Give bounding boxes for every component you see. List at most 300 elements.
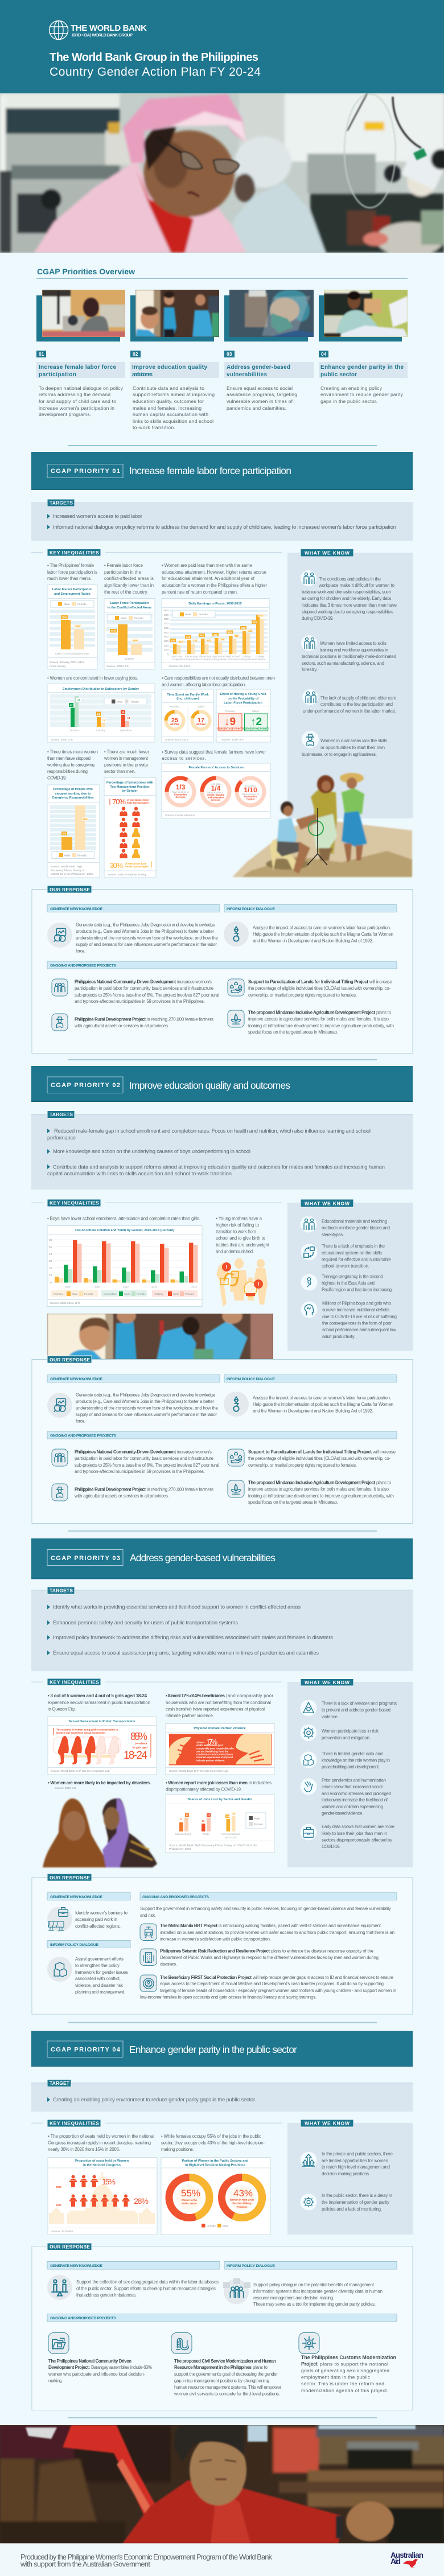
text: dialogue: resource management and decision-making. (253, 2295, 334, 2301)
chart: people who stopped working due to caregiving: Percentage of People who (53, 788, 93, 791)
header banner (0, 0, 444, 93)
chart: labor market participation: and Employment Ratios (54, 592, 91, 596)
chart: effect of having a young child (216, 689, 270, 742)
chart: conflict-affected areas: 77% (111, 629, 116, 632)
chart: sexual harassment: Quezon City experience sexual harassment (56, 1731, 106, 1734)
chart: seats held by women: 28% (134, 2196, 149, 2205)
text: young mothers: babies that are underweight (216, 1242, 270, 1248)
chart: enterprises with top management position: of enterprises have (125, 862, 147, 865)
text: seats in congress (48, 2134, 154, 2152)
know item 1: Educational materials and teaching (322, 1219, 387, 1224)
project: parcelization: will increase (372, 1449, 396, 1455)
text: disasters (48, 1780, 151, 1790)
tag: targets (47, 1111, 75, 1118)
chart: enterprises with top management position: male top managers (127, 801, 149, 804)
know item 1 (301, 1216, 390, 1237)
chart: out-of-school children: 60 (49, 1238, 52, 1242)
icon: dialogue (223, 2278, 250, 2304)
project: community-driven development: increases women's (177, 979, 212, 985)
project: customs modernization: employment data in the public (301, 2375, 371, 2380)
project: mindanao agriculture (228, 1010, 394, 1035)
project: mindanao agriculture: plans to (376, 1480, 392, 1485)
chart: daily earnings: 341 (235, 635, 239, 637)
know item 1: There is a lack of services and programs (322, 1701, 397, 1706)
priority 04 banner (31, 2031, 413, 2067)
chart: effect of having a young child: Females (225, 710, 235, 713)
card 01 number: 01 (39, 351, 44, 357)
chart: shares of jobs lost: Male (254, 1817, 260, 1820)
text: barriers (75, 1910, 128, 1929)
tag: target (47, 2080, 71, 2087)
chart: shares of jobs lost: Manufacturing (175, 1833, 191, 1836)
chart: female farmers' access to services (162, 763, 270, 818)
know item 5: COVID-19. (322, 1844, 340, 1849)
project: customs modernization: modernization agenda of this project. (301, 2388, 388, 2393)
chart: labor market participation: Labor Market Participation (52, 588, 93, 591)
card 03 title: Address gender-based (227, 364, 290, 371)
chart: shares of jobs lost: 21 (180, 1818, 183, 1821)
text: intimate partner violence: cash transfer) have reported experiences of physical (166, 1706, 265, 1712)
chart: out-of-school children: 2009 (94, 1285, 100, 1289)
icon: knowledge (47, 923, 72, 948)
know item 2: sectors, such as manufacturing, science, and (302, 661, 384, 666)
know item 4: adult productivity. (322, 1334, 355, 1339)
project: national community driven: The Philippines National Community Driven (48, 2359, 131, 2364)
know item 1: during COVID-19. (302, 616, 334, 621)
chart: labor market participation: Labor Force Participation Rate (55, 652, 89, 655)
subheading: ongoing and proposed projects (47, 2314, 397, 2322)
text: young mothers: higher risk of failing to (216, 1223, 260, 1228)
chart: daily earnings: 0 (167, 653, 168, 656)
card 04 text (320, 385, 404, 404)
panel: key inequalities 03 (31, 1678, 282, 1867)
card 01 photo (36, 290, 125, 341)
text: young mothers: • Young mothers have a (216, 1216, 262, 1221)
text: seats in congress: nearly 30% in 2020 from 15% in 2006. (48, 2147, 120, 2152)
chart: physical intimate partner violence: Source: World Bank EAP Gender Innovation Lab (169, 1770, 228, 1773)
chart: physical intimate partner violence: are not benefitting from the (196, 1750, 229, 1753)
chart: out-of-school children: 2015 (151, 1285, 157, 1289)
chart: daily earnings: Daily Earnings in Pesos, 2006-2015 (188, 602, 242, 606)
project: rural development: Philippine Rural Development Project (75, 1017, 146, 1022)
text: public sector jobs: sector, they occupy only 43% of the high-level decision- (161, 2140, 265, 2146)
chart: physical intimate partner violence: Almost (196, 1741, 205, 1744)
know item 1: violence. (322, 1714, 339, 1719)
text: policy framework: framework for gender issues (75, 1970, 128, 1975)
tag: targets (47, 499, 75, 507)
panel: key inequalities 01 (31, 549, 282, 781)
project: parcelization: will increase (369, 979, 393, 985)
project: rural development: Philippine Rural Development Project (75, 1487, 146, 1492)
priority 04 banner: Enhance gender parity in the public sector (129, 2044, 297, 2055)
card 02 text: Contribute data and analysis to (133, 385, 204, 391)
text: dialogue: information systems that incorporate gender diversity data in human (253, 2289, 383, 2294)
panel: targets 03: Identify what works in providing essential services and livelihood support to women in conflict-affected areas (53, 1604, 301, 1610)
overview card 02 (130, 290, 219, 430)
text: pay gap: education for a woman in the Philippines offers a higher (162, 583, 267, 588)
chart: female farmers' access to services: have access to (172, 791, 189, 793)
chart: conflict-affected areas: BARMM (125, 657, 134, 660)
chart: out-of-school children: 2006 (65, 1285, 71, 1289)
project: beneficiary first: will help reduce gender gaps in access to ID and financial services to ensure (252, 1975, 394, 1980)
chart: daily earnings: High School (226, 655, 240, 658)
subheading: inform policy dialogue: INFORM POLICY DIALOGUE (227, 2264, 275, 2268)
chart: time spent on family work: Source: ISSP 2012 (165, 738, 188, 742)
know item 4: and economic stresses and prolonged (322, 1791, 391, 1796)
chart: women in public sector and decision-making: Male (223, 2224, 229, 2228)
text: data: that address gender imbalances. (76, 2293, 137, 2298)
photo: woman weaving (0, 2425, 444, 2544)
logo: The World Bank: IBRD • IDA | WORLD BANK GROUP (72, 32, 133, 38)
chart: sexual harassment: 18-24 (124, 1750, 147, 1762)
know item 1: indicates that 3 times more women than men have (302, 603, 397, 608)
text: ongoing intro: Support the government in enhancing safety and security in public services, focusing on gender-based violence and female vulnerability (140, 1906, 391, 1911)
chart: female farmers' access to services: services (211, 799, 221, 801)
subheading: generate new knowledge: GENERATE NEW KNOWLEDGE (50, 2264, 102, 2268)
text: knowledge: Generate data (e.g., the Philippines Jobs Diagnostic) and develop knowledge (76, 1392, 216, 1398)
text: conflict areas (104, 563, 154, 595)
project: national community driven: women who participate and influence local decision- (48, 2372, 145, 2377)
project: metro manila BRT: installed on buses and at stations, to provide women with safer access to and from public transport, ensuring that there is an (160, 1930, 394, 1935)
chart: daily earnings: College (242, 655, 251, 658)
text: disasters: Source: 2019 ILO (55, 1787, 76, 1790)
card 01 text (39, 385, 124, 417)
card 03 text: assistance programs, targeting (227, 392, 297, 397)
card 01 title: Increase female labor force (39, 364, 116, 371)
chart: effect of having a young child: PERCENTAGE POINTS (243, 727, 269, 730)
chart: out-of-school children: 50 (49, 1245, 52, 1249)
chart: physical intimate partner violence: comparably poor households who (196, 1747, 234, 1750)
know item 5: sectors disproportionately affected by (322, 1837, 392, 1843)
card 01 text: for and supply of child care and to (39, 398, 116, 404)
chart: sexual harassment (48, 1717, 157, 1775)
chart: women in public sector and decision-making: 55% (181, 2188, 200, 2199)
text: policy framework: planning and management. (75, 1990, 125, 1994)
panel: targets 03: Ensure equal access to social assistance programs, targeting vulnerable women in times of pandemics and calamities (53, 1649, 319, 1656)
text: seats in congress: Congress increased rapidly in recent decades, reaching (48, 2140, 151, 2146)
know item 5 (301, 1824, 395, 1849)
priority 03 banner (31, 1538, 413, 1579)
project: beneficiary first: equal access to the Department of Social Welfare and Development's cash transfer programs. It will do so by supporting (160, 1981, 384, 1986)
card 03 number: 03 (227, 351, 232, 357)
know item 2: policies and a lack of monitoring. (322, 2207, 382, 2212)
chart: labor market participation: 75% (62, 616, 67, 619)
text: sexual harassment: experience sexual harassment in public transportation (48, 1700, 150, 1705)
project: parcelization: the percentage of eligible individual titles (CLOAs) issued with ownership, co- (248, 1456, 390, 1461)
chart: daily earnings: High School (212, 655, 225, 658)
chart: out-of-school children: 40 (49, 1253, 52, 1256)
chart: seats held by women: 2006 (56, 2186, 61, 2188)
chart: shares of jobs lost: Shares of Jobs Lost by Sector and Gender (187, 1798, 252, 1801)
text: caregiving: COVID-19. (47, 775, 67, 781)
chart: daily earnings (162, 599, 269, 669)
text: job losses: in industries (249, 1780, 272, 1785)
project: civil service modernization: Resource Management in the Philippines (174, 2365, 252, 2370)
chart: daily earnings: 519 (241, 627, 246, 629)
chart: enterprises with top management position: female top managers (125, 865, 149, 868)
project: rural development: is reaching 270,000 female farmers (147, 1487, 213, 1492)
graphic: young mothers: ! (225, 1265, 228, 1271)
know item 4: school performance and subsequent low (322, 1327, 396, 1332)
chart: people who stopped working due to caregiving: 3% (63, 832, 66, 835)
tag: target: TARGET (50, 2080, 70, 2086)
project: civil service modernization: support the government's goal of decreasing the gender (174, 2372, 278, 2377)
text: management (104, 749, 149, 774)
text: pay gap: percent rate of return compared to men. (162, 590, 238, 595)
text: data: of the public sector. Support efforts to develop human resources strategies (76, 2286, 216, 2291)
know item 2: In the public sector, there is a delay in (322, 2193, 392, 2198)
panel: what we know 03 (287, 1679, 413, 1867)
tag: what we know: WHAT WE KNOW (305, 2121, 350, 2126)
priority 01 banner: CGAP PRIORITY 01 (51, 468, 120, 475)
know item 3: peacebuilding and development. (322, 1764, 380, 1770)
know item 2 (301, 2193, 392, 2212)
know item 2: Women participate less in risk (322, 1729, 379, 1734)
project: mindanao agriculture: special focus on the targeted areas in Mindanao. (248, 1030, 338, 1035)
chart: daily earnings: Source: 2019 ILO (169, 665, 191, 668)
project: seismic risk: Department of Public Works and Highways to respond to the different vulnerabilities faced by men and women during (160, 1955, 379, 1960)
know item 1: stopped working due to caregiving responsibilities (302, 609, 393, 615)
chart: employment distribution: Male (117, 700, 123, 703)
chart: daily earnings: 700 (164, 622, 168, 626)
chart: labor market participation: Female (77, 603, 87, 606)
text: lower paying jobs: • Women are concentrated in lower paying jobs. (47, 676, 138, 681)
tag: targets: TARGETS (50, 1588, 73, 1594)
text: public sector jobs: • While females occupy 55% of the jobs in the public (161, 2134, 261, 2139)
text: policy: Analyze the impact of access to care on women's labor force participation. (253, 925, 391, 930)
text: caregiving: • Three times more women (47, 749, 98, 755)
chart: out-of-school children: 30 (49, 1260, 52, 1263)
project: community-driven development (52, 979, 219, 1004)
chart: conflict-affected areas: Female (134, 617, 143, 620)
chart: seats held by women (48, 2157, 157, 2235)
text: management: sector than men. (104, 769, 135, 774)
subheading: inform policy dialogue (224, 1375, 397, 1382)
text: knowledge (76, 922, 219, 954)
tag: what we know: WHAT WE KNOW (305, 1680, 350, 1685)
chart: out-of-school children: Out-of-school Children and Youth by Gender, 2006-2018 (Percent) (75, 1229, 174, 1232)
subheading: ongoing and proposed projects (140, 1893, 397, 1900)
know item 2 (301, 635, 396, 672)
tag: what we know: WHAT WE KNOW (305, 1201, 350, 1207)
chart: time spent on family work: HRS/WK (196, 723, 205, 726)
text: job losses: disproportionately affected by COVID-19. (166, 1787, 242, 1792)
footer (0, 2543, 444, 2576)
project: community-driven development: participation in paid labor for community basic services and infrastructure (75, 986, 214, 991)
card 04 title: public sector (320, 372, 357, 378)
project: parcelization (228, 979, 393, 998)
section heading: CGAP Priorities Overview: CGAP Priorities Overview (37, 267, 135, 276)
text: policy: Analyze the impact of access to care on women's labor force participation. (253, 1396, 391, 1400)
tag: what we know (301, 1679, 353, 1686)
chart: time spent on family work: Females (170, 705, 180, 708)
project: civil service modernization: The proposed Civil Service Modernization and Human (174, 2359, 276, 2364)
overview card 04 (319, 290, 408, 404)
project: mindanao agriculture: improve access to agriculture services for both males and females. It is also (248, 1487, 389, 1492)
text: policy framework: violence, and disaster risk (75, 1983, 123, 1988)
project: seismic risk: plans to enhance the disaster response capacity of the (271, 1949, 374, 1953)
chart: sexual harassment: Source: World Bank EAP Gender Innovation Lab (51, 1770, 110, 1773)
card 03 photo (224, 290, 314, 341)
project: customs modernization (299, 2332, 396, 2393)
text: policy: and the Women in Development and Nation Building Act of 1992. (253, 1408, 373, 1414)
text: female participation: labor force participation is (47, 570, 97, 575)
text: young mothers: transition to work from (216, 1229, 256, 1234)
project: metro manila BRT (140, 1923, 394, 1942)
know item 4: crises show that increased social (322, 1784, 383, 1789)
text: data (76, 2279, 219, 2298)
text: conflict areas: significantly lower than in (104, 583, 154, 588)
chart: daily earnings: Male (185, 613, 191, 616)
card 02 text: links to skills acquisition and school (133, 418, 213, 424)
project: community-driven development: Philippines National Community-Driven Development (75, 979, 176, 985)
text: conflict areas: • Female labor force (104, 563, 143, 568)
panel: targets 03: Improved policy framework to address the differing risks and vulnerabilities associated with males and females in disasters (53, 1634, 333, 1640)
icon: barriers (47, 1907, 72, 1932)
text: knowledge: supply of and demand for care influences women's performance in the labor (76, 1412, 217, 1417)
chart: employment distribution (47, 684, 155, 742)
text: barriers: accessing paid work in (75, 1917, 117, 1922)
project: civil service modernization: human resource management systems. This will empower (174, 2385, 281, 2390)
chart: people who stopped working due to caregiving: Source: World Bank "High (51, 865, 83, 869)
text: dialogue: These may serve as a tool for implementing gender parity policies. (253, 2302, 376, 2307)
chart: employment distribution: Source: 2020 LFS (51, 738, 73, 742)
project: civil service modernization: plans to (253, 2365, 268, 2370)
panel: targets 02: capital accumulation with links to skills acquisition and school to-work transition (47, 1170, 232, 1176)
know item 1: The conditions and policies in the (319, 577, 381, 582)
chart: enterprises with top management position (104, 777, 156, 878)
chart: sexual harassment: 88% (130, 1731, 147, 1742)
panel: targets 02 (31, 1111, 413, 1190)
text: intimate partner violence (166, 1693, 273, 1718)
priority 02 banner: Improve education quality and outcomes (129, 1080, 290, 1091)
text: conflict areas: conflict-affected areas is (104, 576, 154, 581)
project: community-driven development: Philippines National Community-Driven Development (75, 1449, 176, 1455)
project: mindanao agriculture: looking at infrastructure development to improve agriculture productivity, with (248, 1023, 394, 1028)
priority 01 banner: Increase female labor force participation (129, 465, 291, 476)
tag: key inequalities: KEY INEQUALITIES (50, 1679, 99, 1685)
chart: labor market participation: Male (64, 603, 70, 606)
chart: daily earnings: Undergraduate (210, 658, 227, 661)
know item 5: Early data shows that women are more (322, 1824, 395, 1829)
card 02 title: Improve education quality (132, 364, 207, 371)
panel: targets 01 (31, 499, 413, 541)
chart: female farmers' access to services: Source: Centro Saka Inc. (165, 814, 196, 817)
know item 1 (301, 570, 397, 621)
footer credit text: Produced by the Philippine Women's Economic Empowerment Program of the World Bank (20, 2553, 273, 2561)
chart: out-of-school children: 2018 (191, 1285, 197, 1289)
chart: out-of-school children: Female (137, 1293, 146, 1296)
text: policy: and the Women in Development and Nation Building Act of 1992. (253, 938, 373, 944)
text: policy: Help guide the implementation of policies such the Magna Carta for Women (253, 932, 393, 937)
card 02 title (130, 362, 219, 378)
tag: what we know: WHAT WE KNOW (305, 550, 350, 555)
chart: people who stopped working due to caregiving: stopped working due to (55, 792, 91, 796)
know item 2: There is a lack of emphasis in the (322, 1244, 385, 1249)
know item 4: the consequences in the form of poor (322, 1320, 392, 1326)
subheading: generate new knowledge (47, 905, 220, 912)
chart: out-of-school children: Source: 2006-2018, LFS (50, 1302, 80, 1305)
project: community-driven development: participation in paid labor for community basic services and infrastructure (75, 1456, 214, 1461)
card 04 title (319, 362, 408, 378)
icon: policy framework (47, 1957, 72, 1982)
text: young mothers: and undernourished. (216, 1249, 254, 1254)
chart: out-of-school children: 2012 (123, 1285, 129, 1289)
project: customs modernization: The Philippines Customs Modernization (301, 2355, 396, 2360)
project: community-driven development (52, 1449, 219, 1474)
text: policy (253, 925, 393, 944)
know item 1 (301, 2151, 393, 2176)
text: knowledge: products (e.g., Care and Women's Jobs in the Philippines) to foster a better (76, 929, 214, 934)
card 02 text: to-work transition. (133, 425, 175, 430)
project: community-driven development: and typhoon-affected municipalities in 59 provinces in the Philippines. (75, 999, 205, 1004)
photo: two women (43, 1799, 157, 1867)
chart: women in public sector and decision-making: Portion of Women in the Public Sectors and (182, 2159, 249, 2163)
text: conflict areas: participation in the (104, 570, 142, 575)
panel: our response 03 (32, 1874, 413, 2014)
text: ongoing intro (140, 1906, 391, 1918)
know item 2: the implementation of gender parity (322, 2200, 389, 2205)
card 03 number (224, 351, 235, 357)
card 03 title (224, 362, 314, 378)
know item 3: The lack of supply of child and elder care (320, 696, 397, 701)
card 01 title: participation (39, 372, 76, 378)
know item 5: likely to lose their jobs than men in (322, 1831, 387, 1836)
chart: daily earnings: 200 (164, 644, 168, 648)
text: knowledge (76, 1392, 219, 1424)
card 02 text (133, 385, 215, 430)
know item 2 (301, 1725, 379, 1741)
chart: women in public sector and decision-making: Women in the (182, 2199, 198, 2201)
chart: shares of jobs lost: and Food (225, 1836, 236, 1839)
chart: employment distribution: 47 (70, 703, 73, 707)
know item 1: to reach high-level management and (322, 2165, 390, 2170)
chart: time spent on family work: 17 (198, 717, 204, 724)
panel: target 04: Creating an enabling policy environment to reduce gender parity gaps in the public sector. (53, 2096, 256, 2102)
text: care responsibilities: • Care responsibilities are not equally distributed between men (162, 676, 275, 681)
chart: female farmers' access to services: Female Farmers' Access to Services (189, 766, 244, 769)
chart: women in public sector and decision-making: Decision Making (232, 2201, 252, 2205)
project: rural development: with agricultural assets or services in all provinces. (74, 1023, 169, 1028)
text: female farmers: • Survey data suggest that female farmers have lower (162, 750, 266, 755)
text: policy framework: to strengthen the policy (75, 1963, 120, 1968)
chart: women in public sector and decision-making: Positions (237, 2205, 248, 2208)
text: pay gap: educational attainment. However, higher returns accrue (162, 570, 267, 575)
know item 4 (301, 1778, 391, 1816)
know item 2: educational system on the skills (322, 1250, 382, 1256)
chart: women in public sector and decision-making (161, 2157, 270, 2235)
panel: targets 03: Enhanced personal safety and security for users of public transportation systems (53, 1619, 238, 1626)
chart: daily earnings: Undergraduate (183, 658, 200, 661)
project: community-driven development: sub-projects to 25% from a baseline of 8%. The project involves 827 poor rural (75, 993, 219, 998)
chart: daily earnings: 300 (164, 640, 168, 643)
chart: physical intimate partner violence: of 4Ps beneficiaries (and (196, 1744, 223, 1747)
chart: enterprises with top management position: by Gender (122, 789, 138, 793)
know item 4: Women in rural areas lack the skills (320, 738, 387, 743)
text: female participation (47, 563, 97, 581)
text: female participation: • The Philippines' female (47, 563, 94, 568)
chart: employment distribution: Services (70, 729, 80, 732)
text: knowledge: supply of and demand for care influences women's performance in the labor (76, 942, 217, 947)
chart: out-of-school children: Primary (54, 1293, 63, 1296)
text: knowledge: products (e.g., Care and Women's Jobs in the Philippines) to foster a better (76, 1399, 214, 1404)
chart: physical intimate partner violence: conditional cash transfer) have (196, 1753, 233, 1756)
chart: enterprises with top management position: Top Management Position (110, 785, 150, 789)
know item 1: are limited opportunities for women (322, 2158, 388, 2163)
text: job losses (166, 1780, 272, 1792)
subtitle: Country Gender Action Plan FY 20-24 (50, 65, 261, 79)
chart: out-of-school children: Female (84, 1293, 93, 1296)
